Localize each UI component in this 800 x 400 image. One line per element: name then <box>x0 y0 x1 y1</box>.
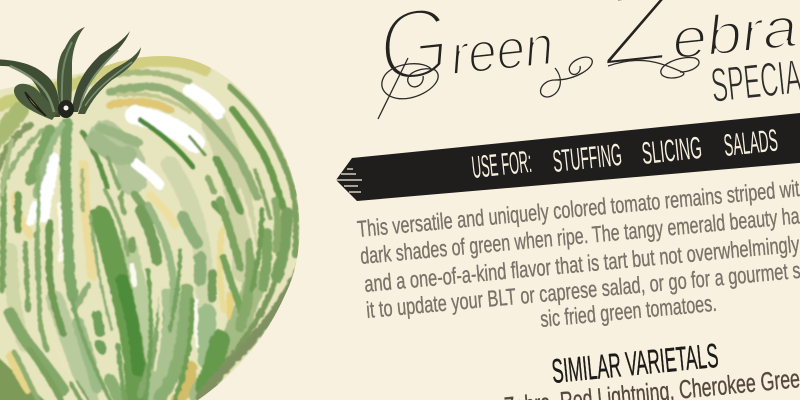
banner: use for: STUFFING <box>551 137 623 179</box>
stem radiating stripes <box>66 123 73 297</box>
banner shape <box>336 112 800 201</box>
yellow rim and washes <box>95 61 205 74</box>
stem and leaves <box>0 27 141 120</box>
banner: use for: USE FOR: <box>470 144 533 185</box>
shaded lower left <box>0 358 45 400</box>
description text: sic fried green tomatoes. <box>539 290 718 332</box>
top arc stripes <box>110 87 257 197</box>
banner: use for <box>336 112 800 201</box>
fine streaks <box>90 215 112 330</box>
lower stripes <box>49 223 63 333</box>
shaded lower edge <box>200 267 300 397</box>
white highlights <box>42 160 52 215</box>
tomato body <box>0 50 310 400</box>
description text <box>356 175 800 332</box>
title flourishes <box>378 57 699 119</box>
pale sage washes <box>105 135 133 180</box>
banner: use for: SLICING <box>640 130 703 171</box>
illustration: green zebra tomato <box>0 27 310 400</box>
